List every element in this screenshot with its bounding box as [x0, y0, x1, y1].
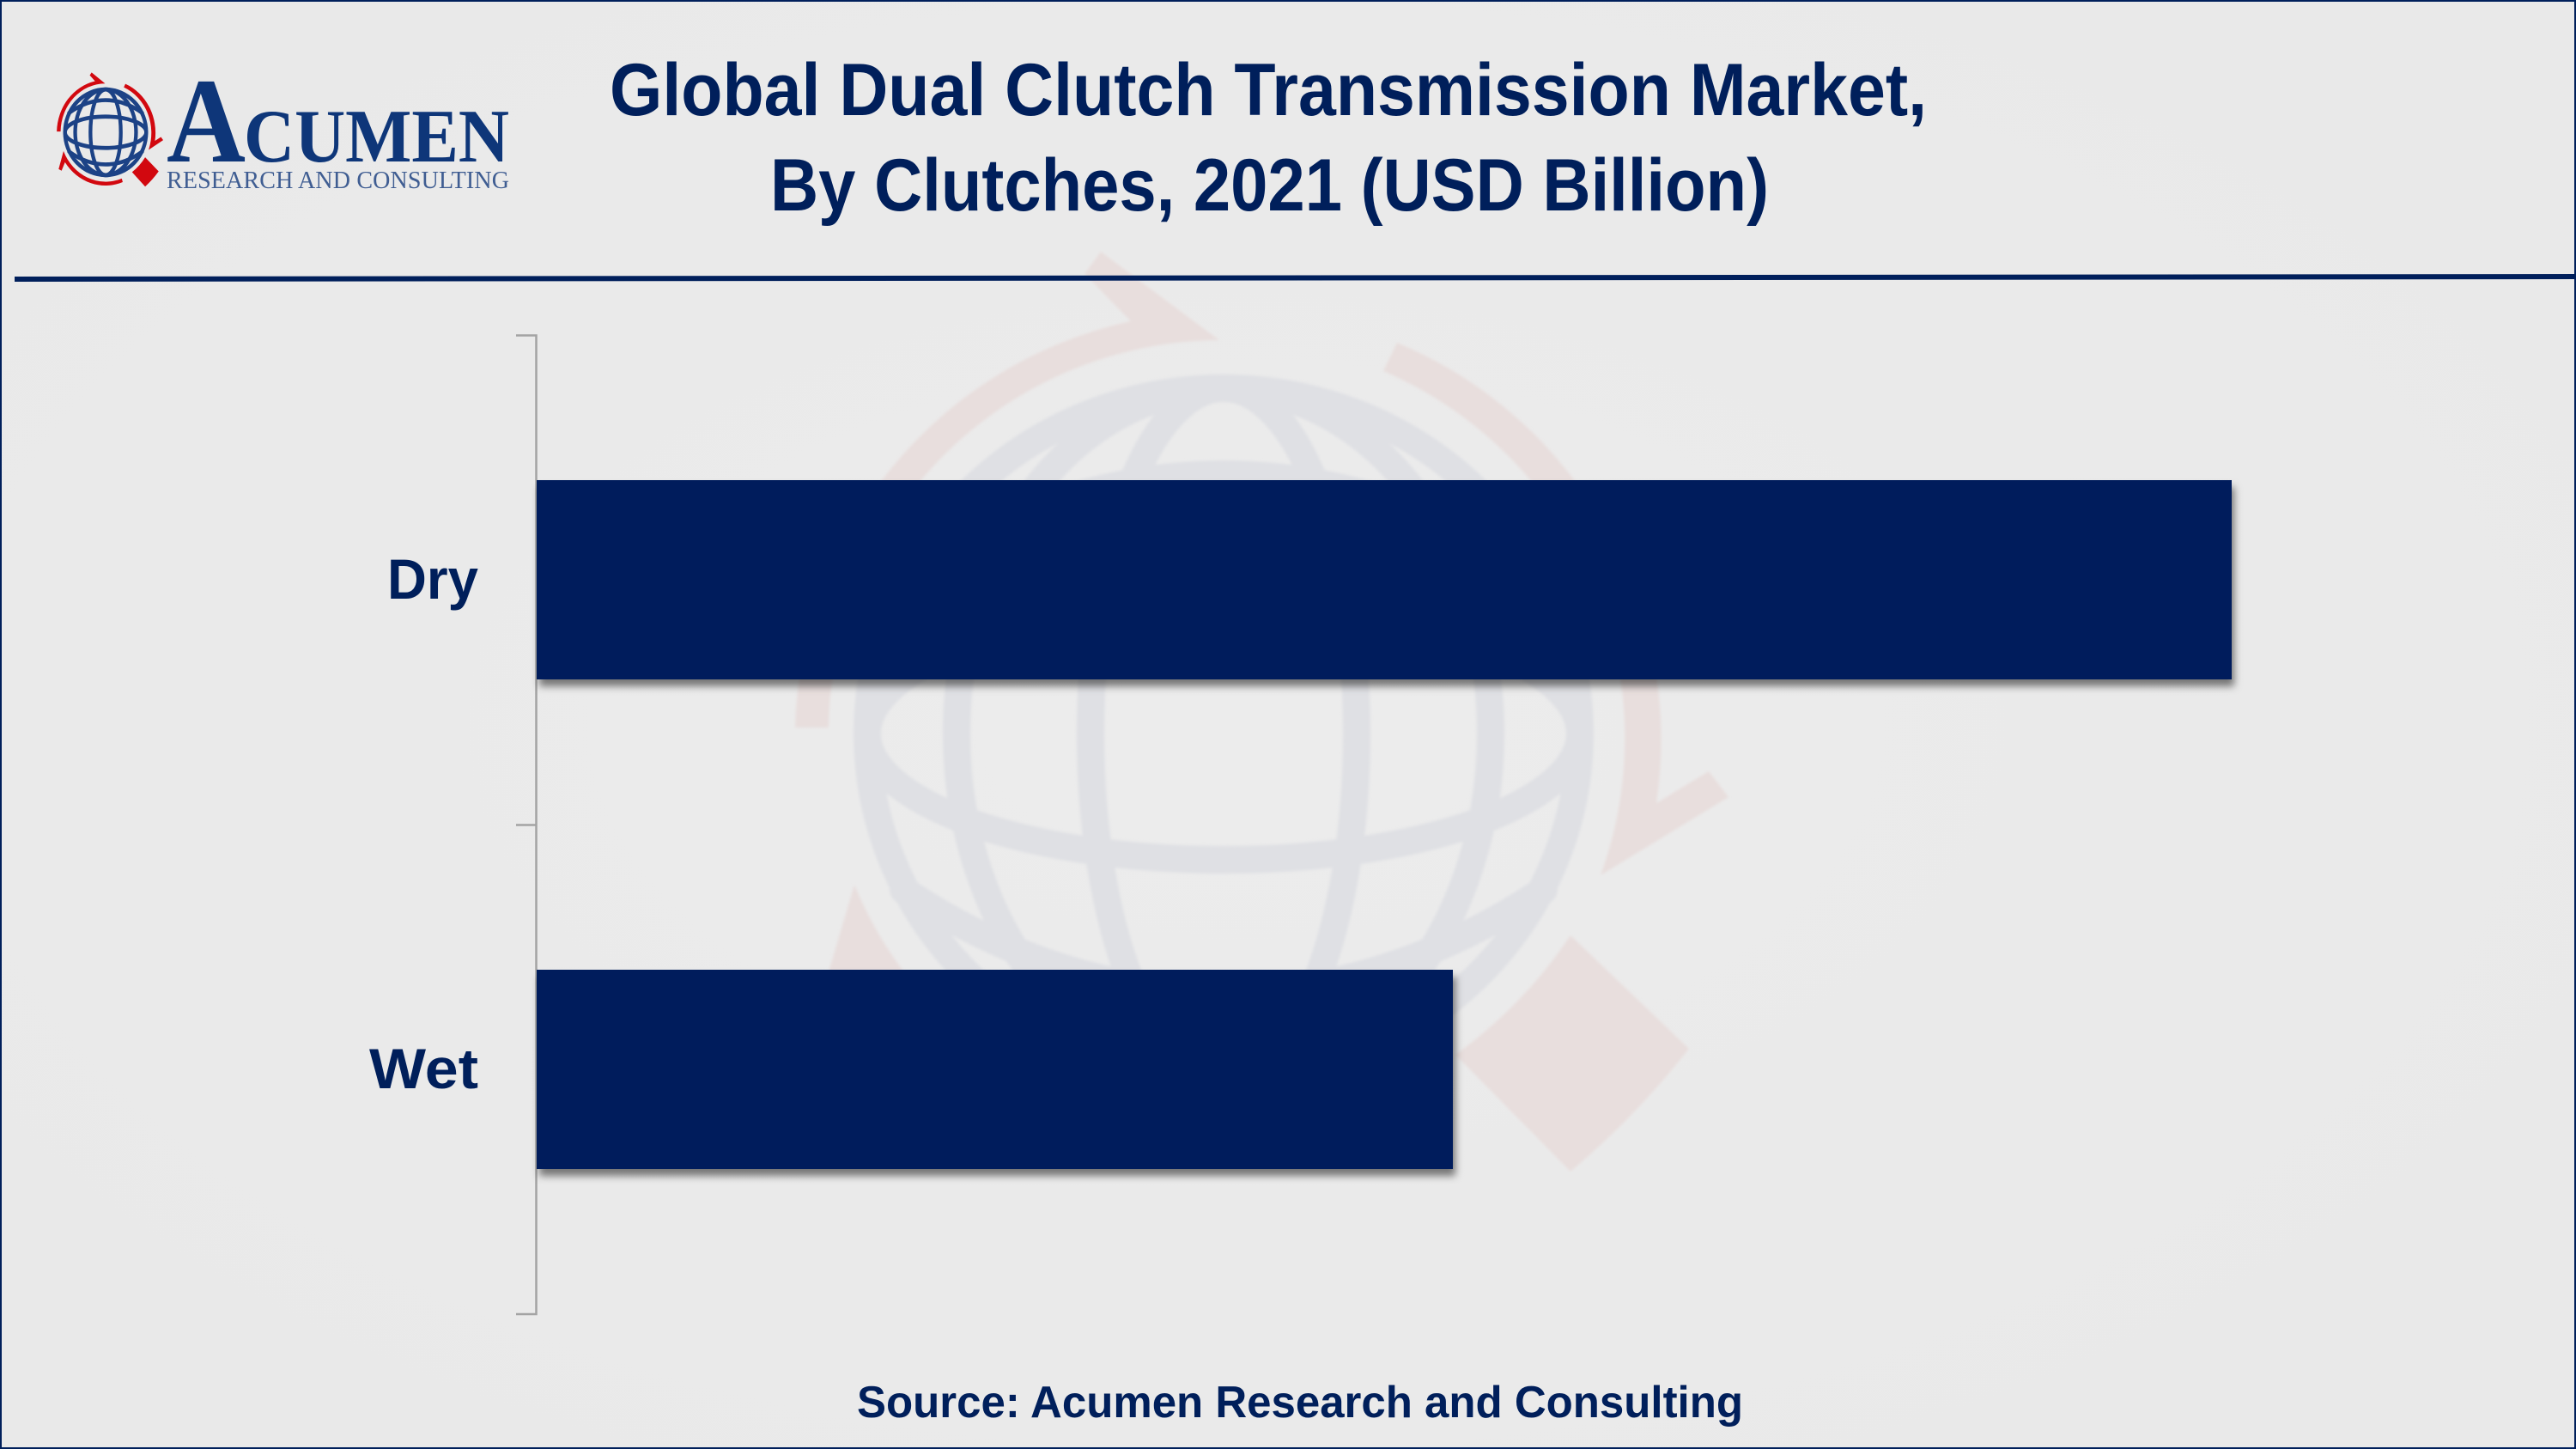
title line 2: By Clutches, 2021 (USD Billion): [770, 144, 1769, 227]
logo wordmark: CUMEN: CUMEN: [244, 95, 509, 179]
watermark: red arrows and diamond: [795, 252, 1728, 1172]
logo icon: globe with red arrows: [57, 72, 163, 186]
source note: Source: Acumen Research and Consulting: [857, 1378, 1743, 1428]
label: Wet: Wet: [369, 1037, 478, 1100]
watermark: Acumen globe logo: [795, 252, 1728, 1172]
logo wordmark: large A: A: [167, 54, 246, 188]
bar: Dry: [537, 480, 2232, 679]
bar chart: market by clutches: [369, 335, 2232, 1314]
logo tagline: RESEARCH AND CONSULTING: [167, 167, 509, 194]
header divider line: [15, 274, 2576, 282]
title line 1: Global Dual Clutch Transmission Market,: [610, 49, 1927, 131]
bar: Wet: [537, 970, 1453, 1169]
category axis: [516, 335, 536, 1314]
watermark: globe wireframe: [867, 388, 1580, 1079]
label: Dry: Dry: [387, 547, 478, 611]
logo: Acumen Research and Consulting: [57, 54, 509, 194]
title: [610, 49, 1927, 227]
